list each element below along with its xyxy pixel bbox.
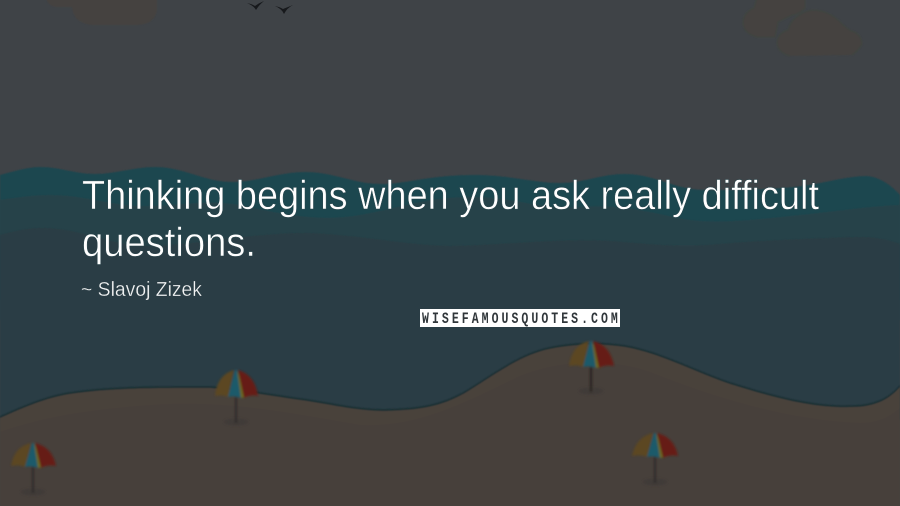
- quote text: Thinking begins when you ask really difficult: [82, 172, 820, 218]
- birds: [247, 1, 293, 14]
- quote text: [82, 172, 820, 265]
- author attribution: ~ Slavoj Zizek: [81, 279, 203, 301]
- umbrella: beach right: [632, 433, 678, 486]
- quote text: questions.: [82, 219, 256, 265]
- umbrella: beach far left: [11, 443, 56, 496]
- beach sand: [0, 343, 900, 506]
- cloud group: top right: [743, 0, 862, 56]
- cloud group: top left: [46, 0, 157, 25]
- umbrella: on crest: [569, 341, 614, 394]
- front wave: [0, 228, 900, 420]
- back wave: [0, 167, 900, 300]
- middle wave: [0, 195, 900, 320]
- watermark badge: WISEFAMOUSQUOTES.COM: [422, 310, 618, 329]
- umbrella: beach centre left: [215, 370, 258, 426]
